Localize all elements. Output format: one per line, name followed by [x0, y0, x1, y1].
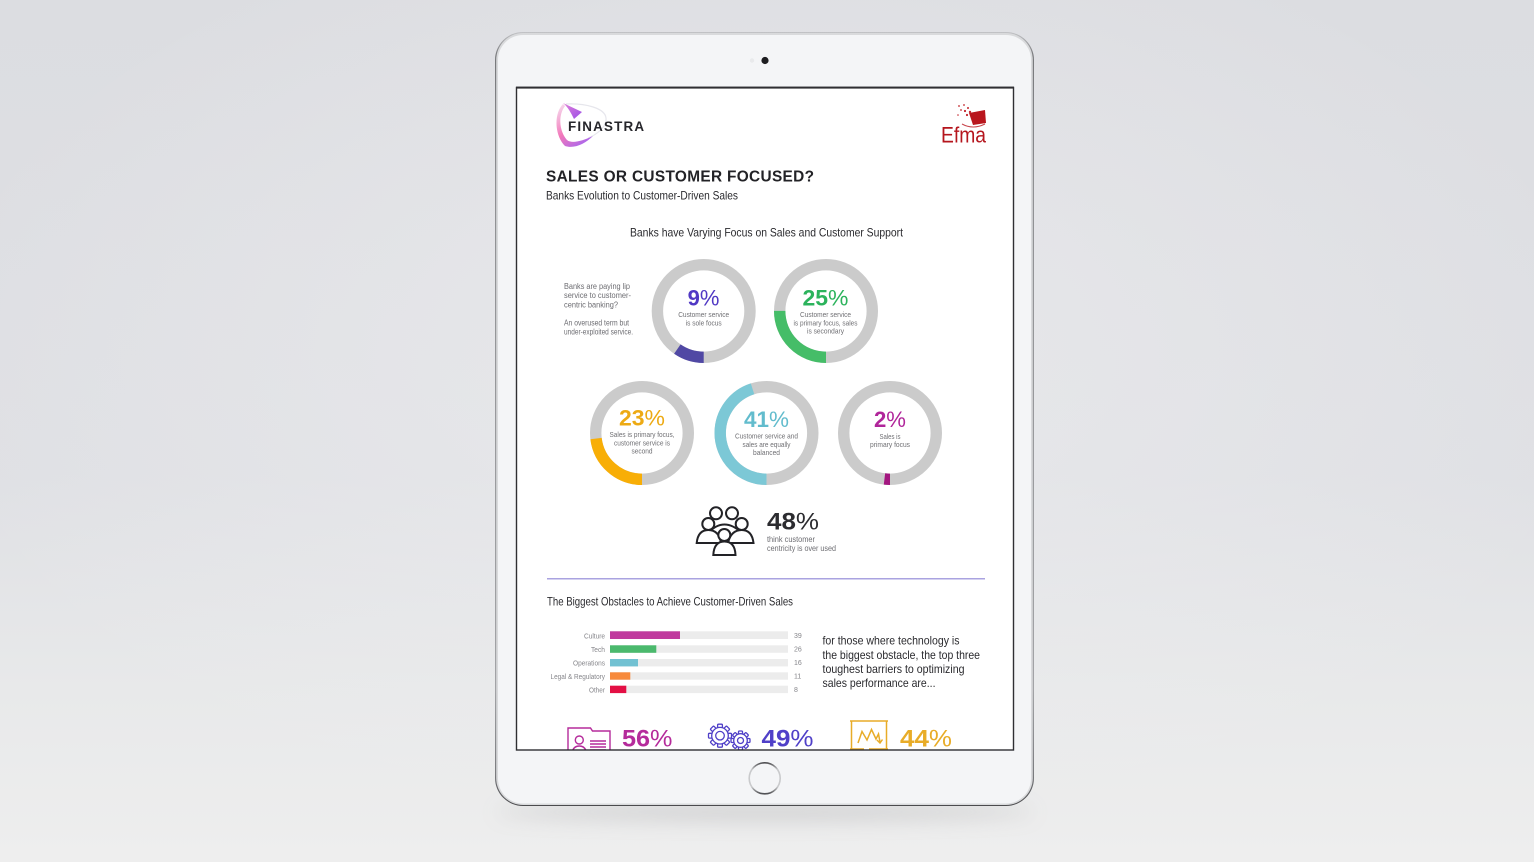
bar: Culture: Culture — [584, 634, 605, 640]
donut: 25% — [780, 265, 872, 357]
stat: 48% — [767, 508, 836, 553]
home button — [749, 763, 780, 794]
bar: Legal & Regulatory — [550, 672, 801, 681]
stat: 56%: 56% — [622, 726, 672, 752]
logo: Finastra — [556, 103, 644, 147]
icon: people group — [697, 507, 754, 555]
donut: 41%: sales are equally — [742, 440, 791, 449]
side note: Banks are paying lip — [564, 282, 631, 291]
donut: 23%: second — [632, 446, 652, 456]
donut: 25%: 25% — [802, 286, 848, 310]
side note: centric banking? — [564, 300, 619, 310]
donut: 23%: customer service is — [614, 438, 670, 448]
text block: top three barriers: toughest barriers to optimizing — [822, 662, 964, 676]
text block: top three barriers: for those where technology is — [822, 634, 960, 648]
donut: 25%: is secondary — [807, 326, 844, 336]
donut: 23% — [596, 387, 688, 479]
logo: Finastra: FINASTRA — [568, 119, 644, 134]
bar: Other: Other — [589, 688, 606, 694]
donut: 2%: primary focus — [870, 440, 910, 449]
donut: 25%: Customer service — [800, 310, 851, 319]
bar: Other: 8 — [794, 687, 798, 694]
stat: 44%: 44% — [900, 726, 952, 752]
side note: under-exploited service. — [564, 328, 633, 336]
donut: 9%: Customer service — [678, 310, 729, 319]
bar: Other — [589, 686, 798, 694]
stat: 48%: think customer — [767, 535, 815, 544]
section heading: varying focus: Banks have Varying Focus on Sales and Customer Support — [630, 226, 904, 240]
subtitle: Banks Evolution to Customer-Driven Sales — [546, 188, 738, 202]
logo: Efma: Efma — [941, 122, 987, 148]
tablet body — [495, 32, 1034, 806]
donut: 2% — [844, 387, 936, 479]
bar: Culture — [584, 631, 802, 640]
text block: top three barriers: the biggest obstacle, the top three — [822, 648, 980, 662]
bar: Legal & Regulatory: Legal & Regulatory — [550, 674, 605, 681]
stat: 48%: 48% — [767, 508, 819, 536]
icon: chart board — [850, 721, 888, 749]
tablet shadow — [495, 804, 1035, 820]
text block: top three barriers — [822, 634, 980, 690]
stat: 48%: centricity is over used — [767, 544, 836, 553]
donut: 23%: 23% — [619, 406, 665, 430]
icon: profile folder — [567, 727, 611, 750]
bar: Culture: 39 — [794, 633, 802, 640]
icon: gears — [708, 724, 750, 750]
logo: Efma — [941, 104, 987, 148]
bar chart — [550, 631, 802, 694]
bar: Tech: Tech — [591, 647, 605, 654]
donut: 9%: is sole focus — [686, 318, 722, 328]
donut: 23%: Sales is primary focus, — [610, 430, 674, 439]
donut: 2%: 2% — [874, 407, 906, 432]
donut: 41% — [720, 387, 813, 479]
donut: 41%: 41% — [744, 407, 789, 432]
stat: 49%: 49% — [762, 726, 814, 752]
donut: 9%: 9% — [688, 286, 719, 310]
side note: An overused term but — [564, 318, 630, 328]
bar: Operations: 16 — [794, 660, 802, 667]
screen — [516, 87, 1014, 760]
bar: Operations: Operations — [573, 660, 605, 668]
camera — [750, 57, 769, 64]
text block: top three barriers: sales performance are... — [822, 676, 936, 690]
donut: 41%: balanced — [753, 448, 780, 457]
bar: Tech — [591, 645, 802, 654]
donut: 41%: Customer service and — [735, 432, 798, 440]
barrier stats row — [567, 720, 952, 750]
bar: Legal & Regulatory: 11 — [794, 674, 801, 680]
side note: service to customer- — [564, 291, 631, 300]
donut: 9% — [657, 265, 750, 357]
bar: Tech: 26 — [794, 646, 802, 654]
section heading: obstacles: The Biggest Obstacles to Achieve Customer-Driven Sales — [547, 594, 793, 608]
title: SALES OR CUSTOMER FOCUSED? — [546, 168, 814, 186]
donut: 25%: is primary focus, sales — [794, 318, 858, 328]
bar: Operations — [573, 659, 802, 668]
donut: 2%: Sales is — [880, 432, 901, 441]
side note — [564, 282, 633, 336]
